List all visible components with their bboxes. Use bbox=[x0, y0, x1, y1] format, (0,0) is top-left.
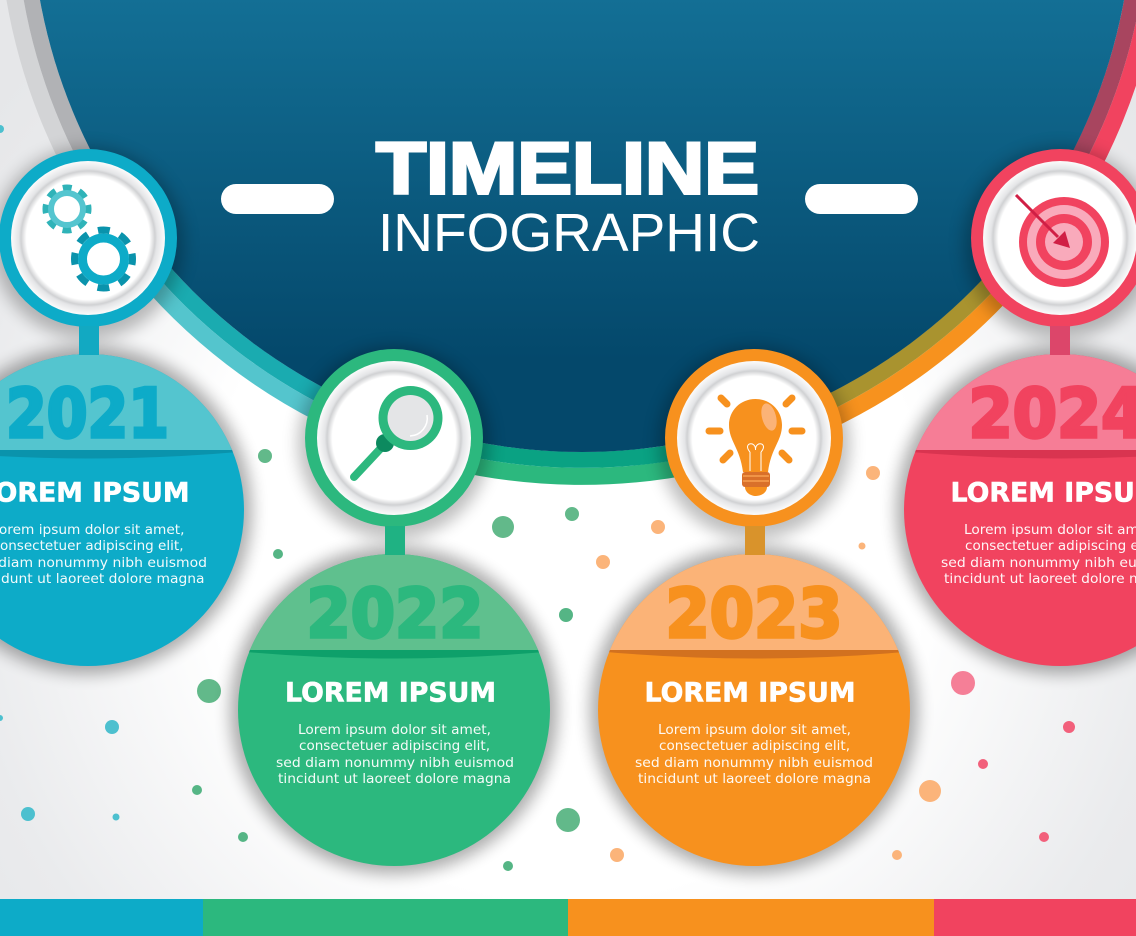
year 2022: 2022 bbox=[306, 575, 484, 654]
year 2023: 2023 bbox=[666, 575, 842, 654]
body text bbox=[0, 522, 207, 587]
header dark semicircle bbox=[31, 0, 1133, 452]
arc track connecting milestones bbox=[13, 0, 1136, 476]
connector stems bbox=[79, 326, 1070, 555]
icon: target with arrow bbox=[1016, 195, 1109, 287]
panel: 2024 bbox=[896, 346, 1136, 674]
title line: TIMELINE: TIMELINE bbox=[376, 128, 759, 210]
node: light bulb bbox=[658, 347, 850, 539]
body text: sed diam nonummy nibh euismod bbox=[276, 755, 514, 771]
body text: sed diam nonummy nibh euismod bbox=[635, 755, 873, 771]
scattered dots bbox=[0, 125, 1075, 871]
body text: Lorem ipsum dolor sit amet, bbox=[658, 722, 851, 738]
heading: LOREM IPSUM bbox=[285, 678, 496, 708]
icon: small gear bbox=[46, 188, 88, 230]
heading: LOREM IPSUM bbox=[644, 678, 856, 708]
body text: Lorem ipsum dolor sit amet, bbox=[298, 722, 491, 738]
node: gears bbox=[0, 147, 184, 339]
title line: INFOGRAPHIC: INFOGRAPHIC bbox=[378, 203, 760, 263]
body text: tincidunt ut laoreet dolore magna bbox=[638, 771, 871, 787]
body text bbox=[276, 722, 514, 787]
right pill bbox=[805, 184, 918, 214]
panel: 2023 bbox=[590, 546, 918, 874]
body text: consectetuer adipiscing elit, bbox=[659, 738, 850, 754]
icon: magnifying glass bbox=[354, 386, 442, 477]
icon: bulb bbox=[709, 398, 802, 496]
panel: 2022 bbox=[230, 546, 558, 874]
body text bbox=[941, 522, 1136, 587]
icon: large gear bbox=[74, 230, 132, 288]
body text: tincidunt ut laoreet dolore magna bbox=[278, 771, 511, 787]
node: magnifier bbox=[298, 347, 490, 539]
node: target bbox=[964, 147, 1136, 339]
title bbox=[376, 128, 760, 263]
body text: consectetuer adipiscing elit, bbox=[299, 738, 490, 754]
bottom colour bar bbox=[0, 899, 1136, 936]
panel: 2021 bbox=[0, 346, 252, 674]
left pill bbox=[221, 184, 334, 214]
year 2021: 2021 bbox=[6, 375, 169, 454]
body text bbox=[635, 722, 873, 787]
